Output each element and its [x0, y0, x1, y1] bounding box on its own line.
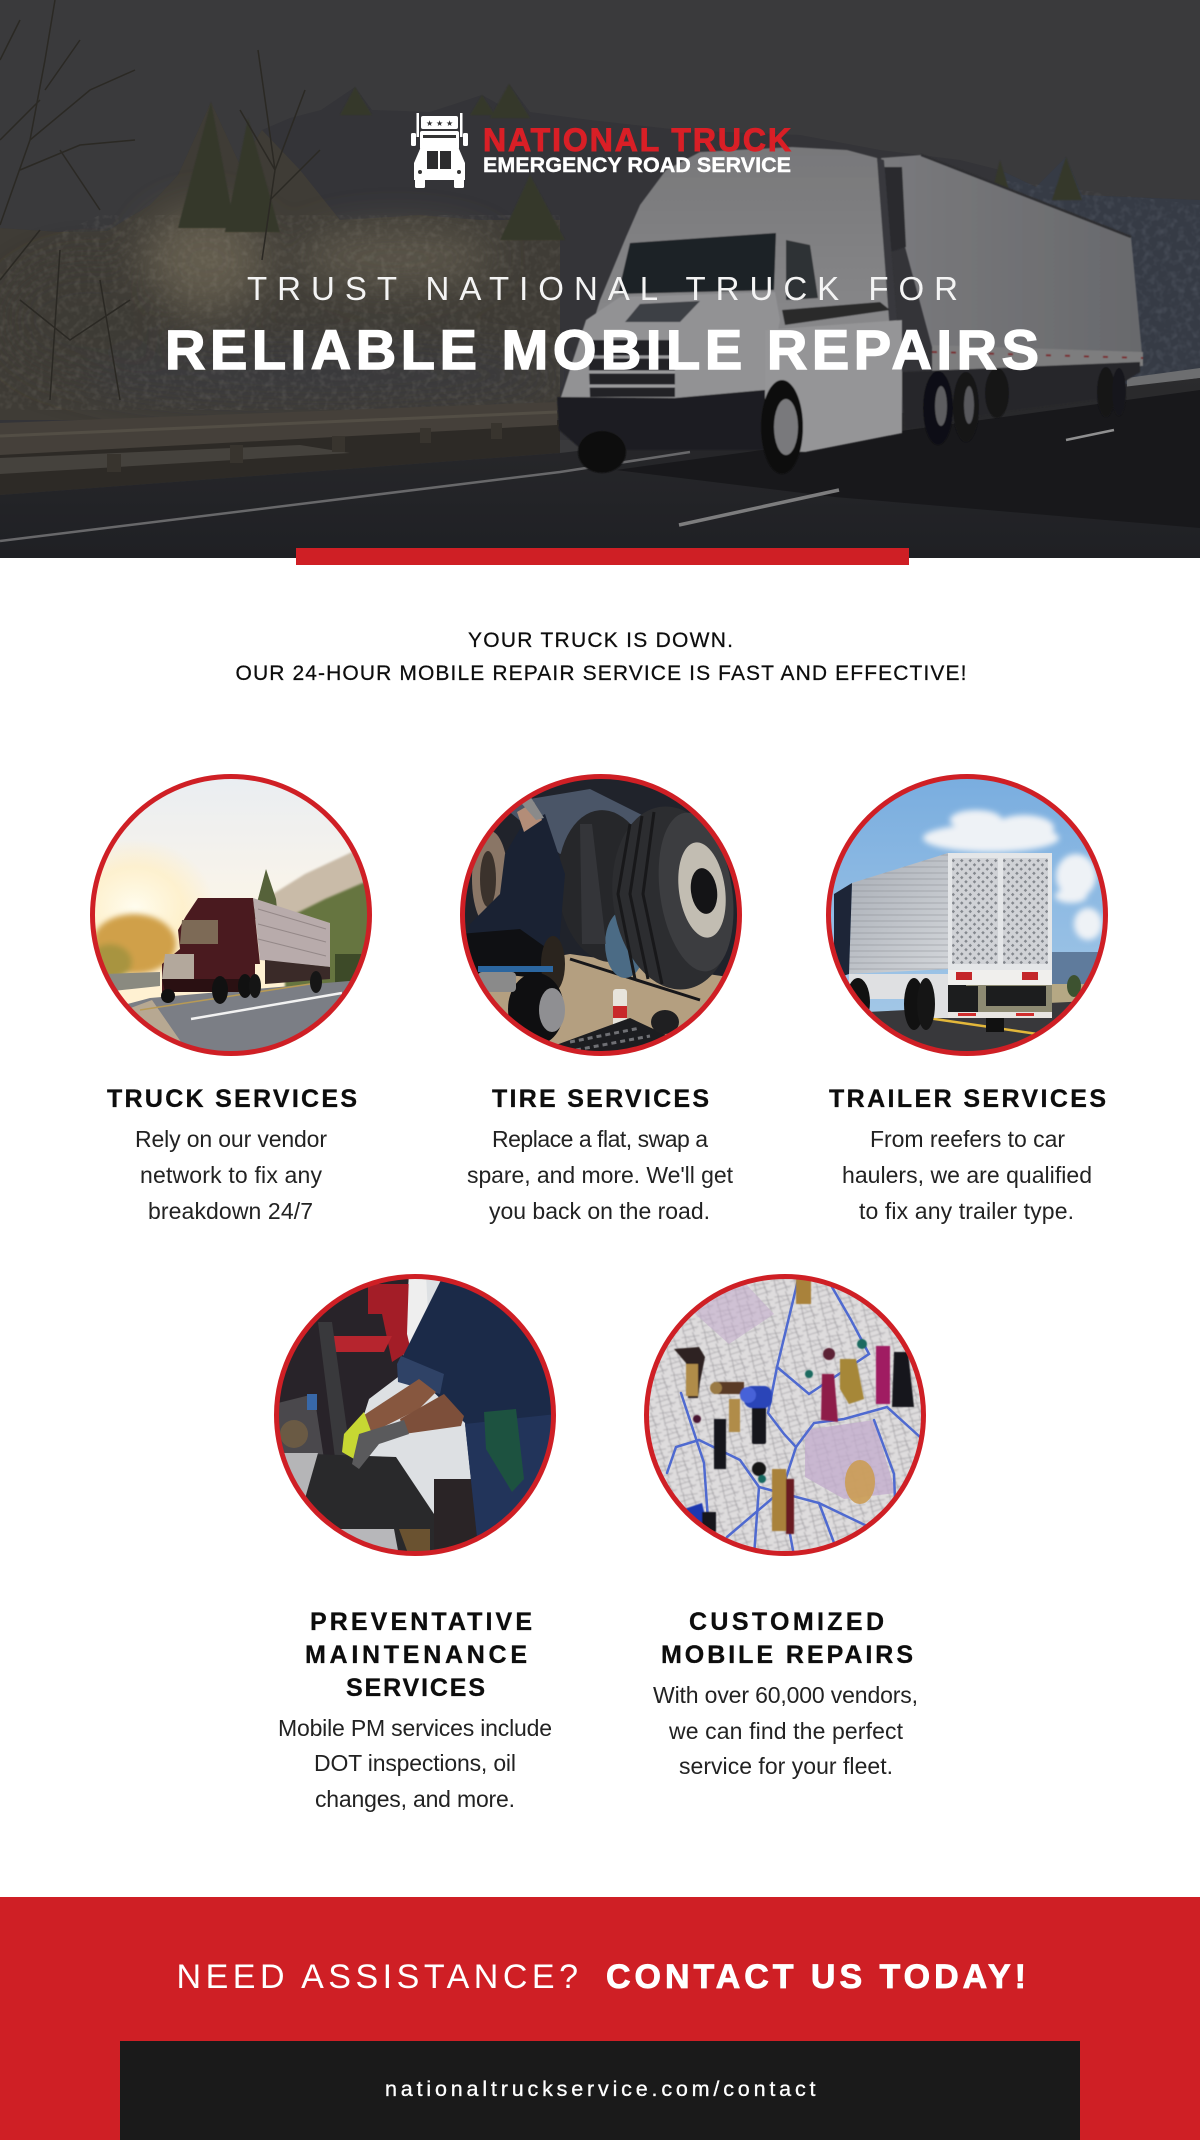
road lines [0, 452, 690, 541]
white semi truck [557, 147, 1143, 474]
front tire [601, 799, 745, 997]
rear tire [552, 806, 660, 966]
deflector [883, 167, 906, 252]
wheels [846, 978, 870, 1026]
right forest [1000, 157, 1200, 400]
conifers [178, 84, 1082, 240]
rolled sleeve [397, 1356, 444, 1394]
photo: silver trailer under blue sky [826, 774, 1108, 1056]
intro text: YOUR TRUCK IS DOWN. [468, 629, 733, 652]
service: customized mobile repairs [644, 1274, 926, 1779]
call to action [176, 1958, 1026, 1996]
front wheels [578, 431, 626, 473]
url text: nationaltruckservice.com/contact [385, 2077, 816, 2101]
title line 1: TRUST NATIONAL TRUCK FOR [247, 270, 958, 307]
service: trailer services [826, 774, 1108, 1224]
intro text: OUR 24-HOUR MOBILE REPAIR SERVICE IS FAST AND EFFECTIVE! [236, 662, 966, 685]
description: spare, and more. We'll get [467, 1162, 734, 1188]
gloves [342, 1412, 372, 1459]
description [842, 1126, 1092, 1224]
icon: white truck front: ★ [436, 119, 443, 128]
pine [254, 869, 277, 919]
truck shadow [616, 390, 1200, 528]
trailer [253, 898, 330, 967]
door [765, 320, 902, 452]
forested hillside [0, 84, 1200, 440]
service: preventative maintenance [274, 1274, 556, 1812]
guardrail [0, 368, 1200, 495]
service: truck services [90, 774, 372, 1219]
heading: MOBILE REPAIRS [661, 1641, 913, 1669]
frosted bushes [132, 200, 493, 324]
description: you back on the road. [489, 1198, 710, 1224]
description [653, 1682, 918, 1779]
side panel [849, 853, 948, 974]
icon: white truck front: ★ [446, 119, 453, 128]
brake hub [472, 831, 508, 927]
icon: white truck front [411, 113, 468, 188]
cab [162, 898, 260, 992]
description: From reefers to car [870, 1126, 1065, 1152]
cab and fairing [586, 147, 902, 452]
bare branches [0, 0, 320, 400]
hood [274, 1453, 434, 1556]
description: we can find the perfect [668, 1718, 904, 1744]
url box [120, 2041, 1080, 2140]
arms [358, 1379, 436, 1434]
heading [305, 1608, 532, 1702]
hood [560, 292, 780, 400]
heading: PREVENTATIVE [310, 1608, 532, 1636]
call to action: CONTACT US TODAY! [606, 1958, 1026, 1996]
intro text [236, 629, 966, 685]
logo [411, 113, 791, 188]
description: Rely on our vendor [135, 1126, 327, 1152]
skirt [849, 974, 948, 1018]
description: haulers, we are qualified [842, 1162, 1092, 1188]
description [467, 1126, 734, 1224]
autumn trees [88, 914, 176, 980]
green slope [284, 882, 367, 986]
frost texture [0, 215, 560, 410]
photo: mechanic and tires [460, 774, 742, 1056]
description: service for your fleet. [679, 1753, 893, 1779]
logo wordmark [483, 122, 791, 177]
photo: map with pins [644, 1274, 926, 1556]
hero photo: truck on winter highway [0, 0, 1200, 558]
photo: maroon truck at sunset [90, 774, 372, 1056]
tools [508, 973, 564, 1045]
description [278, 1715, 552, 1812]
photo: mechanic working on truck engine [274, 1274, 556, 1556]
heading: TRAILER SERVICES [829, 1085, 1106, 1113]
icon: white truck front: ★ [426, 119, 433, 128]
floor [460, 954, 742, 1056]
logo wordmark: EMERGENCY ROAD SERVICE [483, 153, 791, 177]
windshield [618, 233, 776, 294]
heading [661, 1608, 913, 1669]
panel: contact footer [0, 1897, 1200, 2140]
drive and trailer wheels [923, 371, 953, 445]
heading: MAINTENANCE [305, 1641, 527, 1669]
heading: TIRE SERVICES [492, 1085, 709, 1113]
bumper [557, 390, 765, 450]
service: tire services [460, 774, 745, 1224]
description: to fix any trailer type. [859, 1198, 1074, 1224]
headlight [336, 1529, 399, 1556]
machinery [274, 1274, 409, 1462]
rim [673, 839, 731, 941]
verge [0, 420, 560, 495]
heading: TRUCK SERVICES [107, 1085, 357, 1113]
blue frost texture [1007, 181, 1200, 376]
logo wordmark: NATIONAL TRUCK [483, 122, 791, 158]
road [0, 378, 1200, 558]
side window [786, 240, 818, 300]
footer red background [0, 1897, 1200, 2140]
road [128, 980, 350, 1051]
road [826, 1000, 1108, 1056]
panel: hero banner [0, 0, 1200, 558]
trailer [881, 155, 1142, 362]
worker [460, 814, 565, 962]
red accent bar [296, 548, 909, 565]
worker coveralls [401, 1274, 556, 1556]
description [135, 1126, 327, 1224]
brown frosted trees [0, 102, 560, 420]
description: DOT inspections, oil [314, 1750, 516, 1776]
snow patches [0, 445, 350, 474]
dark truck right [434, 1479, 479, 1556]
heading: CUSTOMIZED [689, 1608, 884, 1636]
hood vent [625, 301, 700, 322]
description: Replace a flat, swap a [492, 1126, 708, 1152]
description: breakdown 24/7 [148, 1198, 313, 1224]
rear doors [948, 853, 1052, 969]
call to action: NEED ASSISTANCE? [176, 1958, 578, 1996]
description: changes, and more. [315, 1786, 515, 1812]
description: network to fix any [140, 1162, 322, 1188]
mountain [274, 851, 364, 913]
grille [588, 340, 675, 397]
heading: SERVICES [346, 1674, 485, 1702]
description: Mobile PM services include [278, 1715, 552, 1741]
title line 2: RELIABLE MOBILE REPAIRS [165, 318, 1039, 381]
description: With over 60,000 vendors, [653, 1682, 918, 1708]
